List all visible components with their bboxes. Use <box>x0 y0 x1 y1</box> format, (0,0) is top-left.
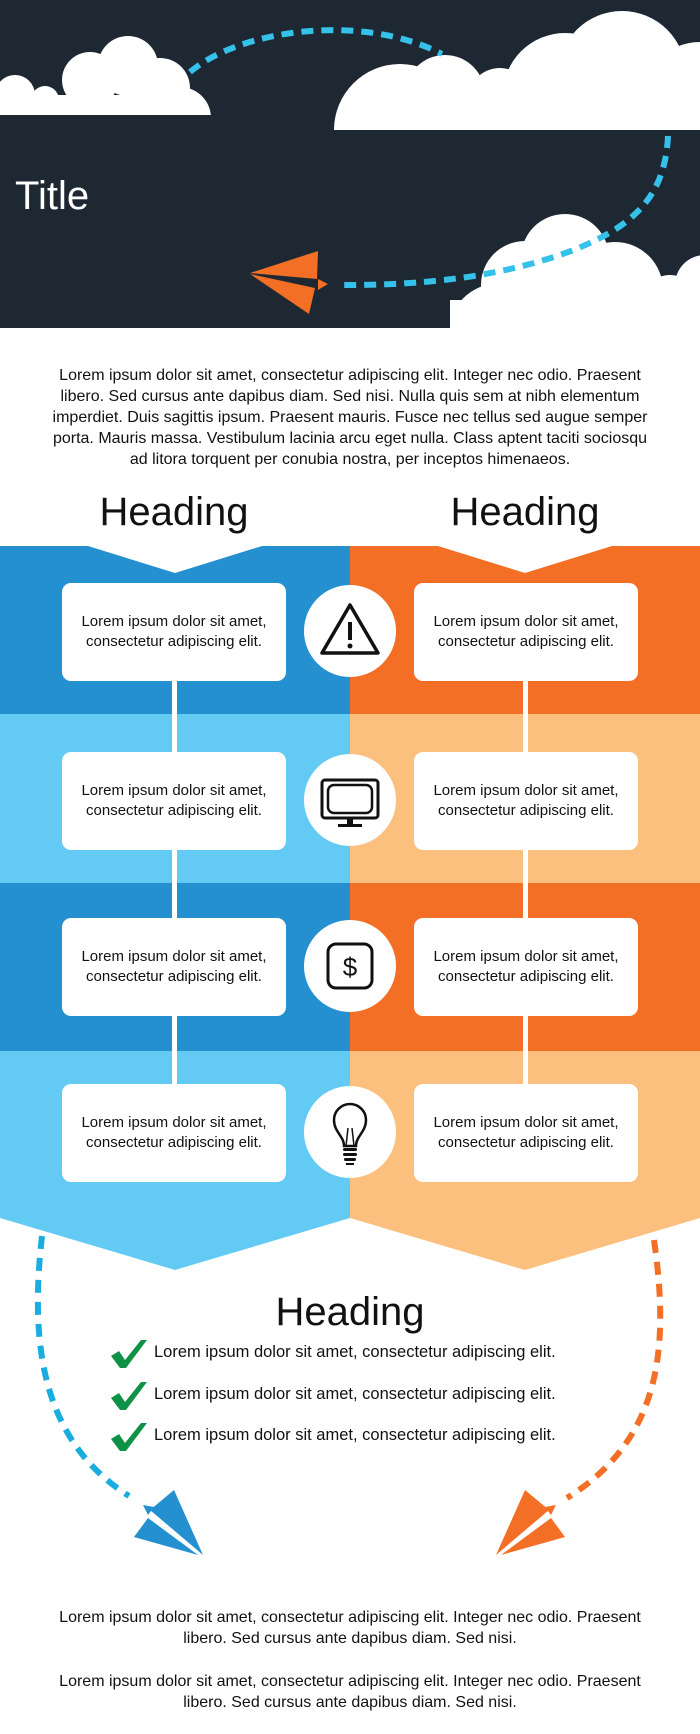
row 3 left box <box>62 918 286 1016</box>
intro paragraph: Lorem ipsum dolor sit amet, consectetur adipiscing elit. Integer nec odio. Praesent libero. Sed cursus ante dapibus diam. Sed nisi. Nulla quis sem at nibh elementum imperdiet. Duis sagittis ipsum. Praesent mauris. Fusce nec tellus sed augue semper porta. Mauris massa. Vestibulum lacinia arcu eget nulla. Class aptent taciti sociosqu ad litora torquent per conubia nostra, per inceptos himenaeos. <box>53 367 647 468</box>
icon: warning <box>304 585 396 677</box>
check item 2: Lorem ipsum dolor sit amet, consectetur adipiscing elit. <box>154 1385 556 1403</box>
row 1 left box: Lorem ipsum dolor sit amet, consectetur adipiscing elit. <box>81 613 267 650</box>
bottom paragraph 1: Lorem ipsum dolor sit amet, consectetur adipiscing elit. Integer nec odio. Praesent libero. Sed cursus ante dapibus diam. Sed nisi. <box>59 1609 641 1647</box>
row 3 right box <box>414 918 638 1016</box>
bottom heading: Heading <box>275 1290 424 1334</box>
icon: monitor <box>304 754 396 846</box>
checklist <box>111 1340 556 1451</box>
dashed path top <box>190 30 442 72</box>
row 2 right box <box>414 752 638 850</box>
icon: orange paper plane <box>496 1490 565 1555</box>
row 1 right box <box>414 583 638 681</box>
heading right: Heading <box>450 490 600 534</box>
row 2 right box: Lorem ipsum dolor sit amet, consectetur adipiscing elit. <box>433 782 619 819</box>
icon: blue paper plane <box>134 1490 203 1555</box>
icon: dollar <box>304 920 396 1012</box>
check item 3 <box>111 1423 556 1451</box>
title: Title <box>15 174 89 218</box>
dashed arrows and planes <box>34 1236 664 1555</box>
icon: orange paper plane <box>250 251 328 314</box>
bottom paragraph 2: Lorem ipsum dolor sit amet, consectetur adipiscing elit. Integer nec odio. Praesent libero. Sed cursus ante dapibus diam. Sed nisi. <box>59 1673 641 1711</box>
row 1 right box: Lorem ipsum dolor sit amet, consectetur adipiscing elit. <box>433 613 619 650</box>
row 4 left box: Lorem ipsum dolor sit amet, consectetur adipiscing elit. <box>81 1114 267 1151</box>
row 2 left box: Lorem ipsum dolor sit amet, consectetur adipiscing elit. <box>81 782 267 819</box>
row 4 right box <box>414 1084 638 1182</box>
check item 1 <box>111 1340 556 1368</box>
row 3 left box: Lorem ipsum dolor sit amet, consectetur adipiscing elit. <box>81 948 267 985</box>
check item 2 <box>111 1382 556 1410</box>
check item 1: Lorem ipsum dolor sit amet, consectetur adipiscing elit. <box>154 1343 556 1361</box>
cloud: bottom right <box>450 214 700 328</box>
icon: dollar: $ <box>343 952 358 982</box>
row 4 right box: Lorem ipsum dolor sit amet, consectetur adipiscing elit. <box>433 1114 619 1151</box>
row 3 right box: Lorem ipsum dolor sit amet, consectetur adipiscing elit. <box>433 948 619 985</box>
row 1 left box <box>62 583 286 681</box>
check item 3: Lorem ipsum dolor sit amet, consectetur adipiscing elit. <box>154 1426 556 1444</box>
cloud: top left <box>0 36 211 115</box>
dashed path right <box>344 136 668 285</box>
heading left: Heading <box>99 490 248 534</box>
icon: lightbulb <box>304 1086 396 1178</box>
band backgrounds <box>0 546 700 1270</box>
cloud: top right <box>334 11 700 130</box>
row 2 left box <box>62 752 286 850</box>
row 4 left box <box>62 1084 286 1182</box>
header <box>0 0 700 328</box>
